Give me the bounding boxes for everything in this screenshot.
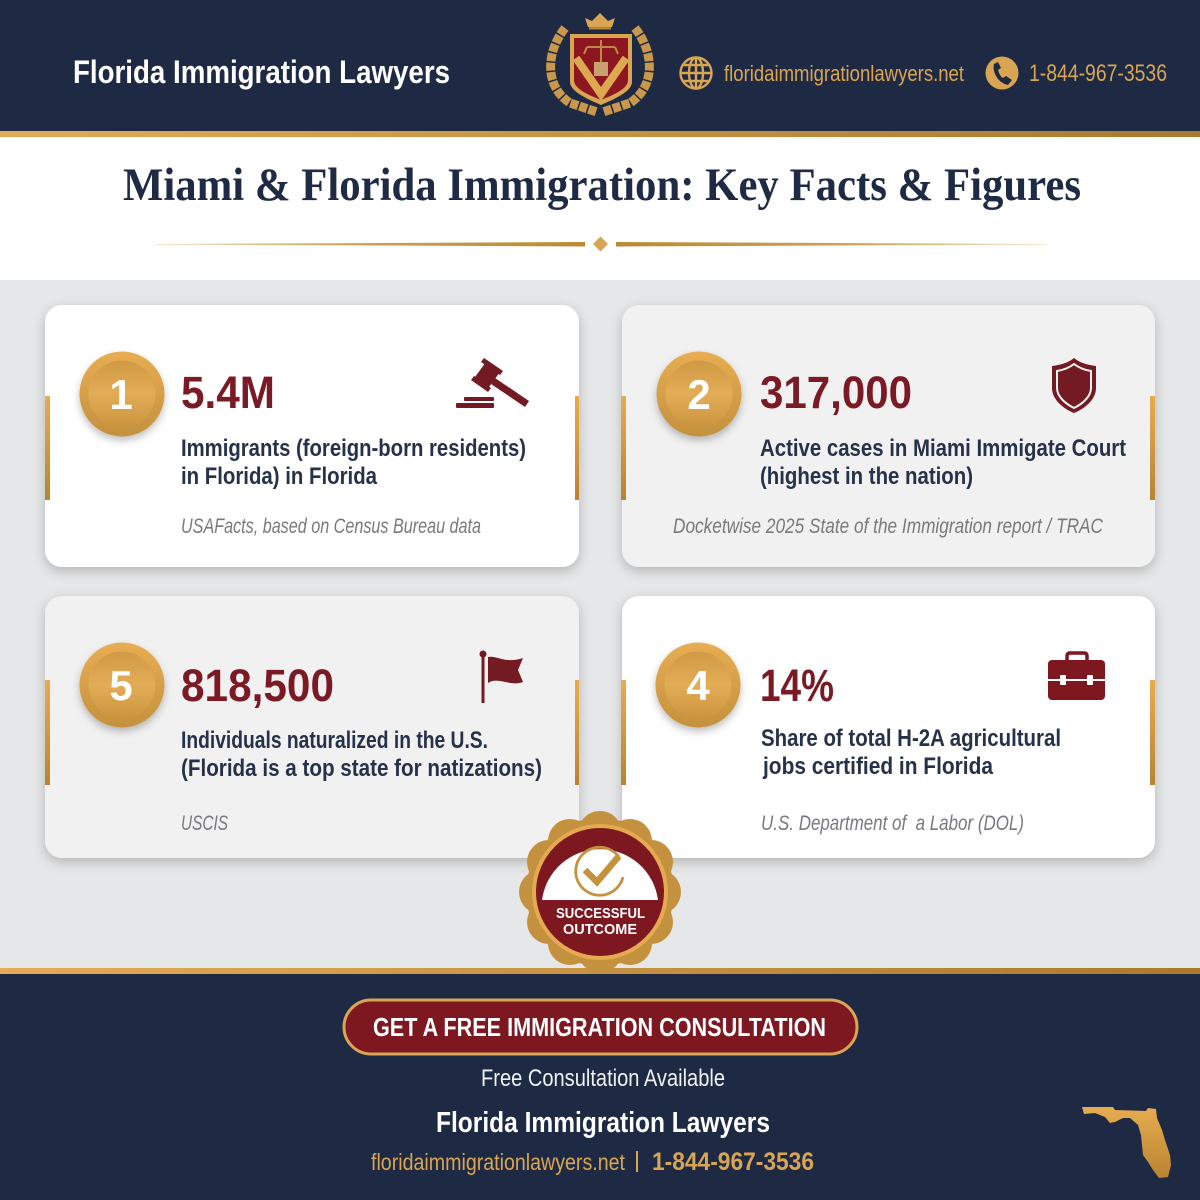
icon: briefcase	[1048, 653, 1105, 700]
footer contact line: floridaimmigrationlawyers.net	[371, 1149, 626, 1175]
title divider	[155, 236, 1046, 252]
description	[181, 435, 526, 490]
page background	[0, 280, 1200, 970]
call to action button	[344, 1000, 857, 1054]
panel: card 4 H-2A jobs	[621, 596, 1155, 858]
seal text: OUTCOME	[563, 921, 637, 938]
footer contact line: 1-844-967-3536	[652, 1148, 814, 1176]
stat 317,000: 317,000	[760, 367, 912, 418]
seal text	[556, 905, 645, 938]
source: USAFacts, based on Census Bureau data	[181, 515, 481, 538]
footer brand name: Florida Immigration Lawyers	[436, 1107, 770, 1139]
icon: Florida map	[1082, 1107, 1171, 1178]
icon: gavel	[456, 358, 529, 408]
icon: globe	[680, 58, 712, 88]
icon: flag	[480, 650, 523, 703]
stat 14%: 14%	[760, 660, 834, 711]
number badge 4	[656, 642, 740, 728]
panel: card 1 immigrants	[45, 305, 579, 567]
website: floridaimmigrationlawyers.net	[724, 61, 964, 86]
description: (highest in the nation)	[760, 463, 973, 490]
description: Immigrants (foreign-born residents)	[181, 435, 526, 462]
number badge 4: 4	[686, 662, 710, 709]
footer band	[0, 968, 1200, 1200]
number badge 5: 5	[109, 662, 133, 709]
description: (Florida is a top state for natizations)	[181, 755, 542, 782]
description	[761, 725, 1061, 780]
stat 818,500: 818,500	[181, 660, 334, 711]
source: Docketwise 2025 State of the Immigration report / TRAC	[673, 515, 1104, 538]
header brand name: Florida Immigration Lawyers	[73, 54, 450, 90]
description: Active cases in Miami Immigate Court	[760, 435, 1126, 462]
number badge 2: 2	[687, 371, 711, 418]
description: in Florida) in Florida	[181, 463, 378, 490]
consultation note: Free Consultation Available	[481, 1065, 725, 1092]
icon: phone	[986, 56, 1018, 90]
stat 5.4M: 5.4M	[181, 367, 275, 418]
icon: shield	[1052, 358, 1096, 413]
number badge 2	[656, 352, 742, 436]
number badge 1	[80, 352, 164, 436]
description	[181, 727, 542, 782]
description: Individuals naturalized in the U.S.	[181, 727, 488, 754]
header band	[0, 0, 1200, 137]
call to action button: GET A FREE IMMIGRATION CONSULTATION	[373, 1012, 826, 1042]
phone number: 1-844-967-3536	[1029, 60, 1167, 87]
seal text: SUCCESSFUL	[556, 905, 645, 922]
number badge 5	[80, 642, 164, 728]
title panel	[0, 137, 1200, 280]
icon: check mark	[576, 847, 623, 895]
number badge 1: 1	[109, 371, 133, 418]
description: jobs certified in Florida	[762, 753, 994, 780]
title: Miami & Florida Immigration: Key Facts & Figures	[123, 159, 1081, 211]
footer contact line	[371, 1148, 814, 1176]
panel: card 2 active cases	[621, 305, 1155, 567]
source: U.S. Department of a Labor (DOL)	[761, 812, 1024, 835]
description: Share of total H-2A agricultural	[761, 725, 1061, 752]
source: USCIS	[181, 812, 228, 835]
seal: successful outcome	[519, 811, 681, 973]
panel: card 3 naturalized	[45, 596, 579, 858]
description	[760, 435, 1126, 490]
logo crest	[551, 13, 649, 112]
